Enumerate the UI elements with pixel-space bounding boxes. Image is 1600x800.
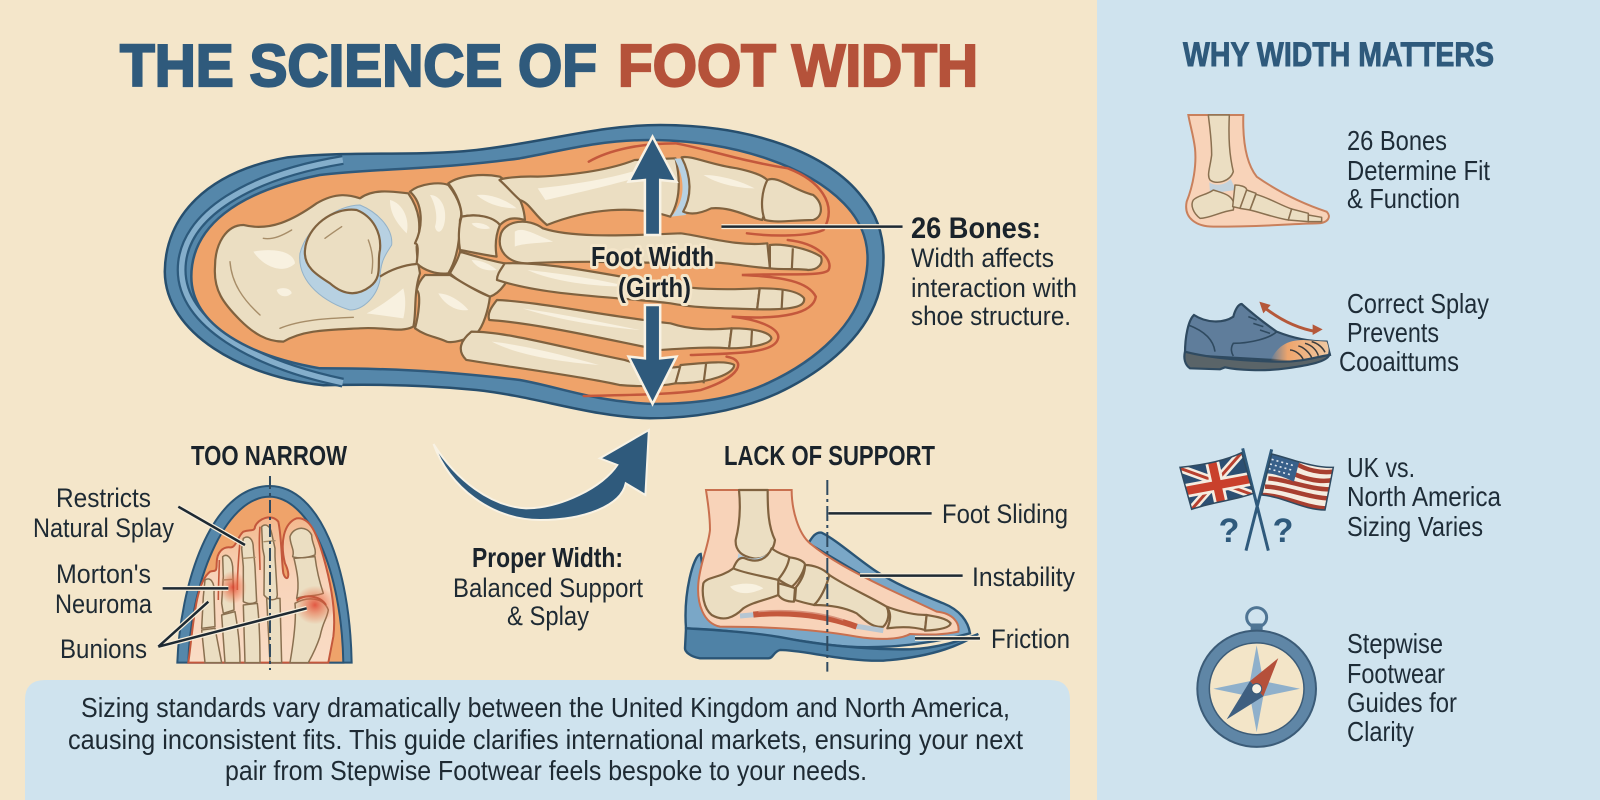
panel: sizing standards note: causing inconsistent fits. This guide clarifies international markets, ensuring your next (68, 724, 1023, 755)
callout: proper width: Balanced Support (453, 573, 643, 603)
callout: 26 bones: 26 Bones: (911, 212, 1041, 245)
labels: too narrow conditions: Morton's (56, 559, 151, 589)
panel: sizing standards note (25, 680, 1070, 800)
illustration: lack of support side view (685, 480, 980, 672)
heel and midfoot bones (215, 175, 525, 342)
callout: 26 bones: Width affects (911, 243, 1054, 273)
toes outline (188, 517, 334, 663)
text: 26 bones determine fit (1347, 125, 1490, 214)
text: correct splay: Cooaittums (1339, 346, 1459, 377)
flag drawings (1177, 447, 1337, 551)
text: correct splay: Prevents (1347, 317, 1439, 348)
panel: why width matters sidebar background (1097, 0, 1600, 800)
callout: 26 bones: interaction with (911, 273, 1077, 303)
panel: sizing standards note: Sizing standards vary dramatically between the United Kingdom and North America, (81, 692, 1010, 723)
heading: why width matters: WHY WIDTH MATTERS (1183, 36, 1494, 74)
heading: too narrow: TOO NARROW (191, 440, 347, 471)
label: foot width girth (591, 241, 714, 303)
center dashed line (269, 476, 271, 670)
shoe toe box (177, 486, 352, 663)
text: 26 bones determine fit: 26 Bones (1347, 125, 1447, 156)
question marks: ? (1219, 512, 1239, 550)
illustration: too narrow foot (158, 476, 352, 670)
text: stepwise footwear guides: Guides for (1347, 687, 1457, 718)
labels: lack of support effects: Foot Sliding (942, 499, 1068, 529)
question marks: ? (1273, 512, 1293, 550)
labels: too narrow conditions: Bunions (60, 634, 147, 664)
text: 26 bones determine fit: & Function (1347, 183, 1460, 214)
leg and foot skin (698, 490, 959, 639)
labels: lack of support effects (942, 499, 1075, 654)
foot bones (703, 490, 951, 631)
text: stepwise footwear guides (1347, 628, 1457, 747)
text: uk vs north america: UK vs. (1347, 452, 1415, 483)
text: uk vs north america: North America (1347, 481, 1501, 512)
text: stepwise footwear guides: Clarity (1347, 716, 1414, 747)
panel: sizing standards note: pair from Stepwise Footwear feels bespoke to your needs. (225, 755, 867, 786)
heading: lack of support: LACK OF SUPPORT (724, 440, 935, 471)
callout: 26 bones (911, 212, 1077, 331)
background: cream main panel (0, 0, 1097, 800)
text: correct splay: Correct Splay (1347, 288, 1489, 319)
text: 26 bones determine fit: Determine Fit (1347, 155, 1490, 186)
icon: crossed UK and US flags (1177, 447, 1337, 551)
label: foot width girth: (Girth) (618, 272, 691, 303)
text: correct splay (1339, 288, 1489, 377)
labels: lack of support effects: Friction (991, 624, 1070, 654)
labels: too narrow conditions: Natural Splay (33, 513, 174, 543)
text: uk vs north america: Sizing Varies (1347, 511, 1483, 542)
callout: 26 bones: shoe structure. (911, 301, 1071, 331)
sole (685, 628, 978, 661)
title: THE SCIENCE OF (120, 33, 597, 99)
text: stepwise footwear guides: Footwear (1347, 658, 1445, 689)
text: stepwise footwear guides: Stepwise (1347, 628, 1443, 659)
arrow: splay (1259, 302, 1323, 335)
leader lines (828, 513, 980, 638)
metatarsal and toe bones (461, 157, 822, 386)
icon: compass (1197, 608, 1316, 747)
leader line (721, 224, 903, 229)
icon: foot side skeleton (1186, 115, 1329, 227)
illustration: foot skeleton top view inside shoe (165, 125, 903, 418)
inflammation glows (219, 571, 247, 604)
arrow: curved to proper width (434, 430, 649, 520)
shoe upper (686, 533, 970, 647)
callout: proper width: Proper Width: (472, 542, 623, 573)
label: foot width girth: Foot Width (591, 241, 714, 272)
shoe outline and interior (165, 125, 883, 418)
icon: shoe with splaying toes (1184, 302, 1330, 370)
labels: lack of support effects: Instability (972, 562, 1075, 592)
labels: too narrow conditions: Restricts (56, 483, 151, 513)
toe bones (202, 525, 328, 663)
leader lines (158, 507, 307, 647)
labels: too narrow conditions (33, 483, 174, 664)
dashed center line (826, 480, 828, 672)
callout: proper width (453, 542, 643, 631)
callout: proper width: & Splay (507, 601, 589, 631)
title (120, 33, 978, 99)
plantar tissue (740, 611, 883, 631)
labels: too narrow conditions: Neuroma (55, 589, 153, 619)
interior (188, 497, 343, 663)
title: FOOT WIDTH (618, 33, 978, 99)
question marks (1219, 512, 1293, 550)
width arrow (629, 137, 677, 404)
text: uk vs north america (1347, 452, 1501, 542)
